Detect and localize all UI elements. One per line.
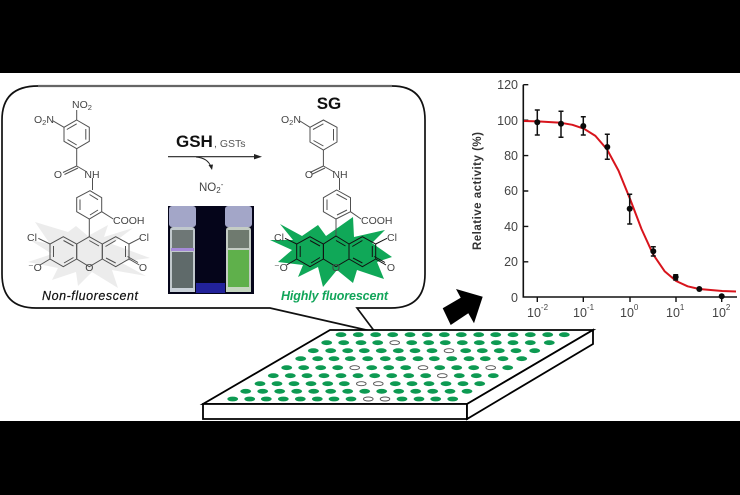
reaction arrow with reagents bbox=[168, 132, 262, 195]
x labels: 10 bbox=[666, 306, 680, 320]
y labels: 120 bbox=[497, 78, 518, 92]
atom labels: O bbox=[332, 262, 340, 274]
y labels: 100 bbox=[497, 114, 518, 128]
y labels bbox=[497, 78, 518, 305]
reaction arrow with reagents: , GSTs bbox=[214, 138, 246, 150]
big black arrow bbox=[443, 289, 483, 325]
atom labels: 2 bbox=[42, 118, 46, 127]
atom labels: N bbox=[46, 114, 54, 126]
atom labels: 2 bbox=[289, 118, 293, 127]
x labels bbox=[527, 303, 731, 320]
callout bubble bbox=[2, 86, 425, 332]
atom labels: N bbox=[293, 114, 301, 126]
right vial bbox=[225, 206, 252, 292]
atom labels: Cl bbox=[139, 232, 149, 244]
atom labels: O bbox=[139, 262, 147, 274]
x labels: -1 bbox=[587, 303, 595, 312]
molecule: non-fluorescent substrate bbox=[27, 99, 150, 288]
bottom black band bbox=[0, 421, 740, 495]
atom labels: O bbox=[85, 262, 93, 274]
bonds bbox=[285, 120, 387, 267]
y labels: 80 bbox=[504, 149, 518, 163]
x labels: 10 bbox=[573, 306, 587, 320]
reaction arrow with reagents: 2 bbox=[216, 186, 221, 195]
y labels: 20 bbox=[504, 255, 518, 269]
atom labels bbox=[27, 99, 149, 274]
atom labels: 2 bbox=[88, 103, 92, 112]
x labels: 10 bbox=[712, 306, 726, 320]
atom labels: O bbox=[281, 114, 289, 126]
grey burst behind xanthene bbox=[28, 222, 150, 288]
atom labels: NO bbox=[72, 99, 88, 111]
x labels: 1 bbox=[680, 303, 685, 312]
atom labels: COOH bbox=[113, 215, 144, 227]
bonds bbox=[38, 110, 140, 267]
x labels: 10 bbox=[527, 306, 541, 320]
atom labels: Cl bbox=[27, 232, 37, 244]
y axis title: Relative activity (%) bbox=[472, 132, 484, 250]
x ticks bbox=[537, 297, 722, 302]
y labels: 0 bbox=[511, 291, 518, 305]
green burst behind xanthene bbox=[270, 217, 392, 287]
blue reflection bbox=[196, 283, 225, 293]
left vial bbox=[169, 206, 196, 292]
atom labels: Cl bbox=[274, 232, 284, 244]
atom labels bbox=[274, 94, 397, 274]
fit curve bbox=[524, 121, 736, 292]
label: non-fluorescent: Non-fluorescent bbox=[42, 289, 139, 303]
atom labels: O bbox=[54, 169, 62, 181]
atom labels: O bbox=[34, 114, 42, 126]
atom labels: COOH bbox=[361, 215, 392, 227]
top black band bbox=[0, 0, 740, 73]
x labels: 2 bbox=[726, 303, 731, 312]
atom labels: ⁻O bbox=[274, 262, 288, 274]
reaction arrow with reagents: - bbox=[221, 180, 224, 189]
atom labels: Cl bbox=[387, 232, 397, 244]
atom labels: O bbox=[387, 262, 395, 274]
x labels: 0 bbox=[634, 303, 639, 312]
empty wells bbox=[350, 341, 496, 401]
y ticks bbox=[523, 85, 528, 262]
y labels: 40 bbox=[504, 220, 518, 234]
microplate bbox=[203, 330, 593, 419]
plate body bbox=[203, 330, 593, 419]
dose-response chart bbox=[472, 78, 737, 320]
reaction arrow with reagents: NO bbox=[199, 182, 216, 194]
molecule: fluorescent product bbox=[270, 94, 397, 287]
data points bbox=[534, 119, 725, 299]
error bars bbox=[535, 110, 678, 280]
axes bbox=[523, 85, 737, 297]
x labels: 10 bbox=[620, 306, 634, 320]
photo: two vials under UV bbox=[168, 206, 254, 294]
x labels: -2 bbox=[541, 303, 549, 312]
wells bbox=[227, 332, 570, 401]
reaction arrow with reagents: GSH bbox=[176, 132, 213, 151]
atom labels: NH bbox=[332, 169, 348, 181]
y labels: 60 bbox=[504, 184, 518, 198]
atom labels: O bbox=[305, 169, 313, 181]
label: highly fluorescent: Highly fluorescent bbox=[281, 289, 389, 303]
atom labels: SG bbox=[317, 94, 341, 113]
atom labels: NH bbox=[84, 169, 100, 181]
atom labels: ⁻O bbox=[28, 262, 42, 274]
